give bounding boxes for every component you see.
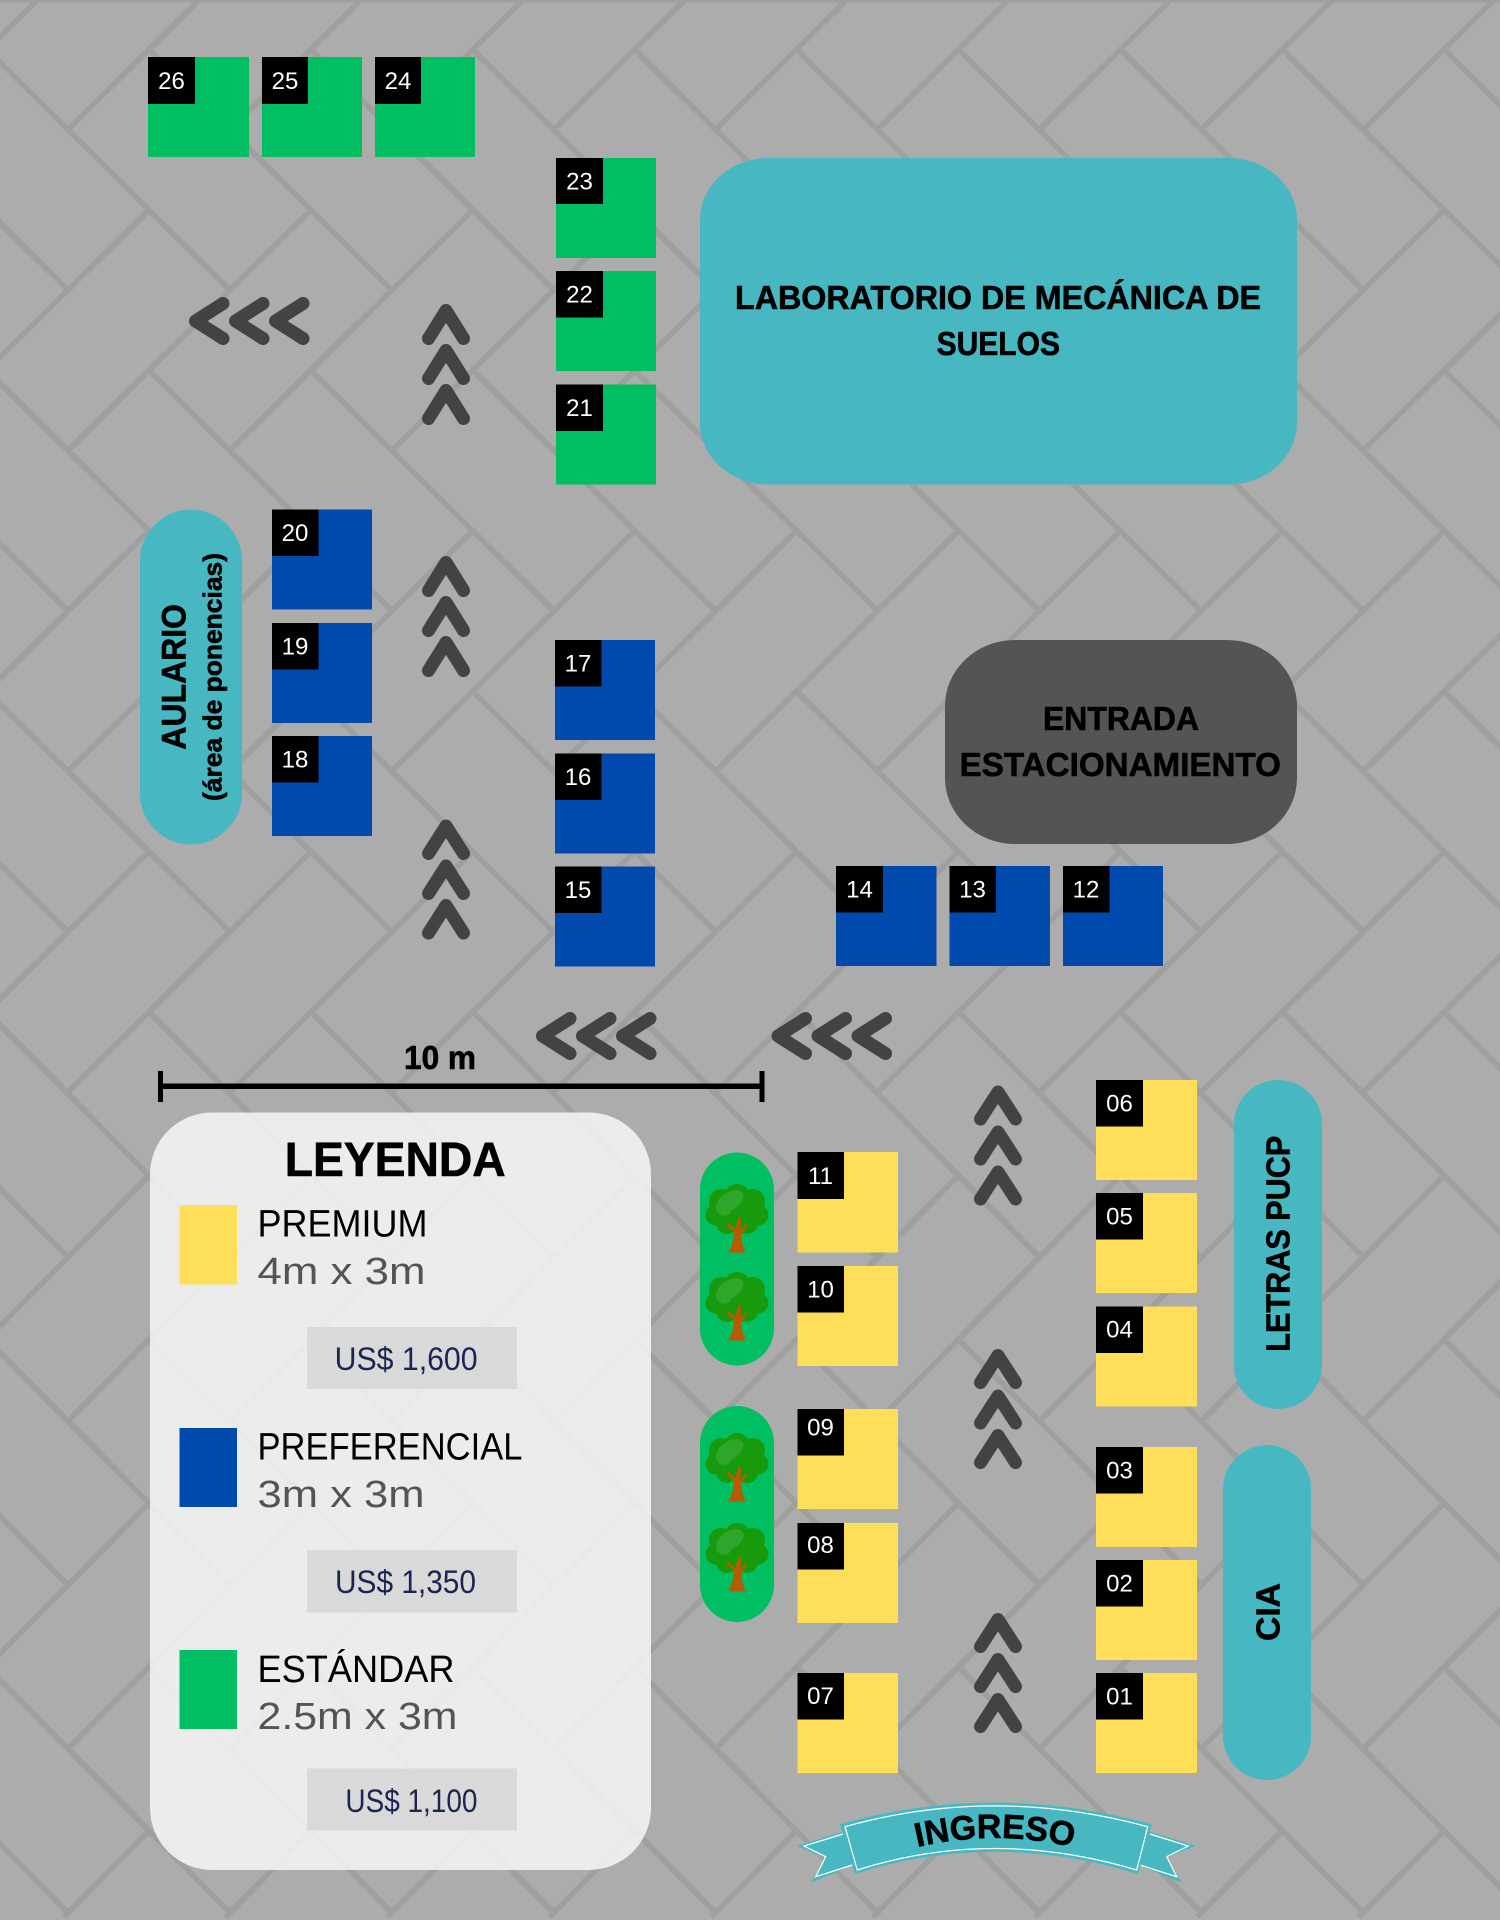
building: aulario: (área de ponencias) [198, 553, 228, 801]
banner: ingreso [797, 1802, 1196, 1883]
legend item: preferencial [180, 1427, 522, 1516]
stand 18 [272, 736, 372, 836]
building: laboratorio de mecánica de suelos: SUELOS [937, 325, 1060, 362]
price: preferencial: US$ 1,350 [335, 1564, 476, 1600]
legend heading: LEYENDA [285, 1134, 506, 1187]
building: letras pucp: LETRAS PUCP [1260, 1136, 1297, 1352]
stand 21 [556, 384, 656, 484]
planter with two trees, lower [700, 1406, 774, 1622]
legend item: preferencial: 3m x 3m [258, 1474, 424, 1516]
banner: ingreso: INGRESO [914, 1814, 1074, 1847]
legend item: estándar [180, 1648, 458, 1738]
stand 10: 10 [807, 1276, 834, 1304]
stand 23: 23 [566, 168, 593, 196]
stand 18: 18 [282, 746, 308, 774]
stand 03 [1096, 1447, 1197, 1547]
building: laboratorio de mecánica de suelos [700, 158, 1297, 484]
price: estándar: US$ 1,100 [345, 1783, 477, 1819]
stand 25: 25 [272, 68, 298, 95]
stand 13 [950, 866, 1050, 966]
stand 09 [798, 1409, 898, 1509]
stand 22: 22 [566, 282, 593, 308]
stand 02: 02 [1106, 1570, 1133, 1598]
stand 15 [555, 866, 655, 966]
building: cia: CIA [1250, 1583, 1287, 1641]
legend item: premium: PREMIUM [258, 1204, 428, 1246]
stand 14: 14 [846, 876, 873, 904]
building: aulario: AULARIO [156, 604, 194, 750]
legend item: preferencial: PREFERENCIAL [258, 1427, 522, 1469]
stand 04 [1096, 1306, 1197, 1406]
stand 05 [1096, 1193, 1197, 1293]
stand 24 [375, 57, 475, 157]
stand 13: 13 [959, 876, 986, 904]
stand 02 [1096, 1560, 1197, 1660]
stand 15: 15 [565, 877, 591, 904]
building: entrada estacionamiento: ENTRADA [1043, 700, 1199, 737]
building: laboratorio de mecánica de suelos: LABORATORIO DE MECÁNICA DE [735, 279, 1261, 316]
arrow: up chevrons, upper aisle 2 [428, 562, 464, 670]
price: premium [307, 1327, 517, 1389]
building: entrada estacionamiento [945, 640, 1297, 844]
stand 19 [272, 623, 372, 723]
stand 14 [836, 866, 936, 966]
stand 23 [556, 158, 656, 258]
stand 04: 04 [1106, 1316, 1133, 1344]
panel: legend [150, 1112, 651, 1870]
stand 25 [262, 57, 362, 157]
stand 26: 26 [158, 68, 185, 95]
building: cia [1223, 1445, 1311, 1780]
price: estándar [307, 1768, 517, 1830]
stand 21: 21 [566, 395, 593, 422]
stand 17 [555, 640, 655, 740]
stand 20: 20 [282, 520, 308, 547]
arrow: left chevrons, top [196, 304, 303, 338]
stand 20 [272, 510, 372, 610]
stand 06 [1096, 1080, 1197, 1180]
stand 16: 16 [565, 764, 591, 791]
stand 08 [798, 1523, 898, 1623]
stand 07: 07 [807, 1683, 834, 1710]
price: premium: US$ 1,600 [335, 1341, 478, 1377]
stand 06: 06 [1106, 1090, 1133, 1118]
arrow: left chevrons, centre left [542, 1018, 650, 1054]
arrow: up chevrons, upper aisle 3 [428, 826, 464, 933]
stand 09: 09 [807, 1414, 834, 1442]
stand 07 [798, 1673, 898, 1773]
legend item: premium [180, 1204, 428, 1293]
scale bar: 10 m: 10 m [404, 1039, 476, 1076]
stand 12: 12 [1073, 876, 1099, 904]
planter with two trees, upper [700, 1152, 774, 1366]
stand 01: 01 [1106, 1684, 1133, 1710]
stand 12 [1063, 866, 1163, 966]
stand 11: 11 [808, 1163, 833, 1190]
legend item: premium: 4m x 3m [258, 1251, 426, 1293]
stand 17: 17 [565, 650, 591, 678]
arrow: left chevrons, centre right [778, 1018, 886, 1054]
arrow: up chevrons, lower aisle 1 [980, 1092, 1016, 1199]
legend item: estándar: 2.5m x 3m [258, 1696, 458, 1738]
price: preferencial [307, 1550, 517, 1612]
building: letras pucp [1234, 1080, 1322, 1409]
stand 22 [556, 271, 656, 371]
arrow: up chevrons, lower aisle 2 [980, 1356, 1016, 1462]
stand 11 [798, 1152, 898, 1252]
stand 03: 03 [1106, 1458, 1133, 1484]
stand 24: 24 [385, 68, 411, 95]
building: aulario [140, 510, 242, 844]
stand 19: 19 [282, 634, 308, 660]
stand 16 [555, 754, 655, 854]
legend item: estándar: ESTÁNDAR [258, 1648, 454, 1691]
stand 05: 05 [1106, 1204, 1133, 1230]
scale bar: 10 m [158, 1039, 764, 1102]
arrow: up chevrons, upper aisle 1 [428, 310, 464, 418]
arrow: up chevrons, lower aisle 3 [980, 1620, 1016, 1726]
stand 08: 08 [807, 1532, 834, 1559]
stand 01 [1096, 1673, 1197, 1773]
stand 26 [148, 57, 249, 157]
stand 10 [798, 1266, 898, 1366]
building: entrada estacionamiento: ESTACIONAMIENTO [960, 746, 1281, 783]
